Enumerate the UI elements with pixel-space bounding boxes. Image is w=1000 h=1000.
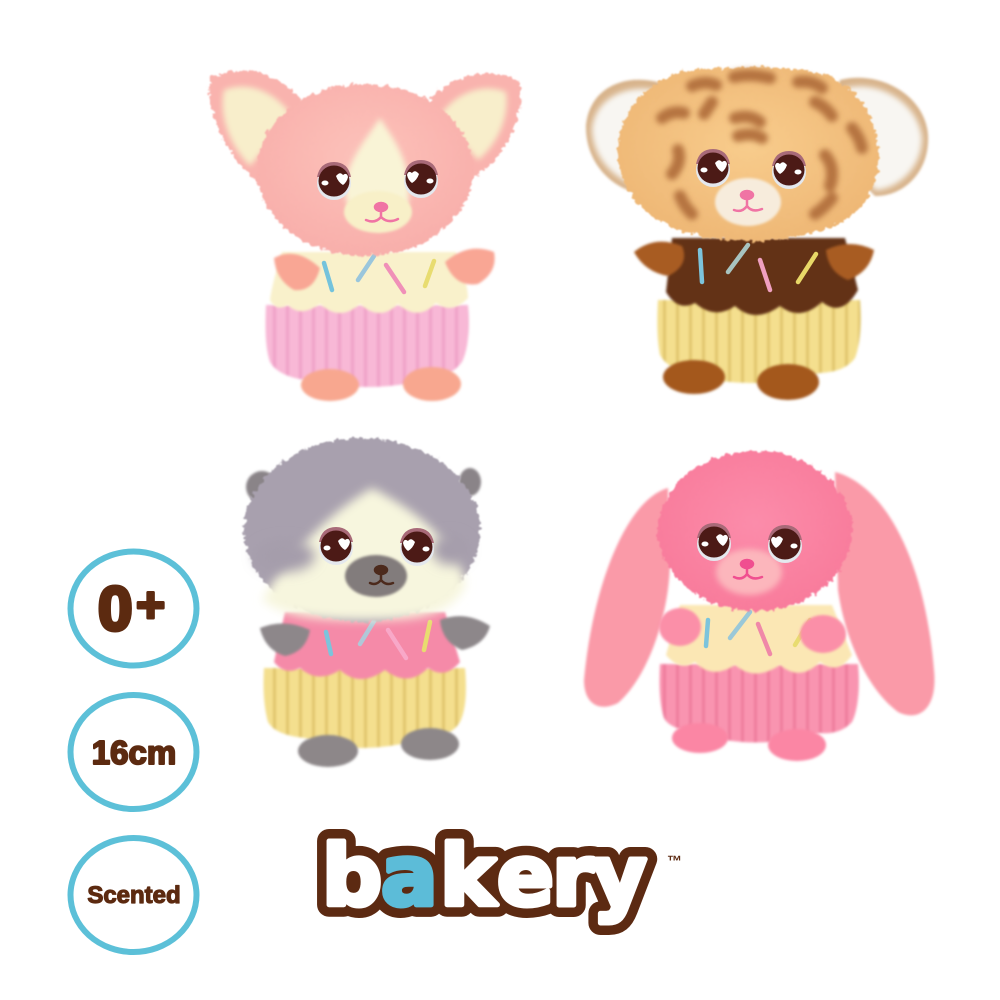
leopard inner ears xyxy=(592,86,922,190)
leopard ears xyxy=(586,78,928,196)
cat head xyxy=(257,84,473,256)
bunny feet xyxy=(672,723,826,761)
otter cupcake wrapper xyxy=(264,668,466,748)
otter eyes xyxy=(319,527,434,566)
bunny ears xyxy=(584,472,935,715)
cat nose and mouth xyxy=(366,203,398,221)
badge: size 16cm xyxy=(70,695,196,809)
otter arms xyxy=(260,616,490,656)
leopard chocolate frosting xyxy=(666,238,858,315)
badge: size 16cm: 16cm xyxy=(92,734,176,771)
toy: pink cat cupcake plush xyxy=(209,70,521,401)
leopard feet xyxy=(663,360,819,400)
otter sprinkles xyxy=(326,618,430,658)
leopard eyes xyxy=(696,149,806,189)
logo: bakery: ™ xyxy=(667,853,682,870)
bunny cupcake wrapper xyxy=(660,664,859,742)
leopard spots xyxy=(662,75,862,214)
otter feet xyxy=(298,728,459,767)
badge: scented xyxy=(70,838,196,952)
otter head xyxy=(244,438,480,622)
bunny frosting xyxy=(666,605,852,674)
otter cheek patches xyxy=(255,535,468,572)
bunny sprinkles xyxy=(706,612,810,654)
bunny muzzle xyxy=(716,549,782,595)
otter nose and mouth xyxy=(370,566,393,584)
cat cupcake wrapper xyxy=(266,305,469,387)
toy: otter cupcake plush xyxy=(244,438,490,767)
bunny nose and mouth xyxy=(734,560,762,578)
otter pink frosting xyxy=(274,612,460,679)
badge: scented: Scented xyxy=(87,882,181,909)
leopard cupcake wrapper xyxy=(657,300,861,383)
leopard muzzle xyxy=(715,178,781,226)
otter cream face xyxy=(262,488,466,620)
logo: bakery: bakery xyxy=(322,827,647,925)
cat face blaze xyxy=(345,118,409,205)
cat sprinkles xyxy=(324,256,434,292)
badge: age 0+ xyxy=(70,552,196,666)
cat muzzle xyxy=(344,191,412,233)
cat feet xyxy=(301,367,461,401)
otter muzzle xyxy=(345,555,407,597)
logo: bakery: bakery xyxy=(322,827,647,925)
badge: age 0+: + xyxy=(136,577,165,633)
toy: pink bunny cupcake plush xyxy=(584,451,935,761)
badge: age 0+: 0 xyxy=(98,575,132,644)
leopard arms xyxy=(634,242,874,280)
leopard sprinkles xyxy=(700,245,816,290)
bunny head xyxy=(658,451,852,611)
bunny arms xyxy=(659,608,846,653)
cat inner ears xyxy=(223,86,507,166)
leopard head xyxy=(618,67,879,241)
leopard nose and mouth xyxy=(734,191,762,211)
otter ears xyxy=(246,468,481,503)
toy: leopard cupcake plush xyxy=(586,67,928,400)
cat eyes xyxy=(317,160,438,200)
bunny eyes xyxy=(697,523,802,563)
cat arms xyxy=(274,249,495,290)
cat frosting xyxy=(270,252,468,313)
cat ears xyxy=(209,70,521,190)
